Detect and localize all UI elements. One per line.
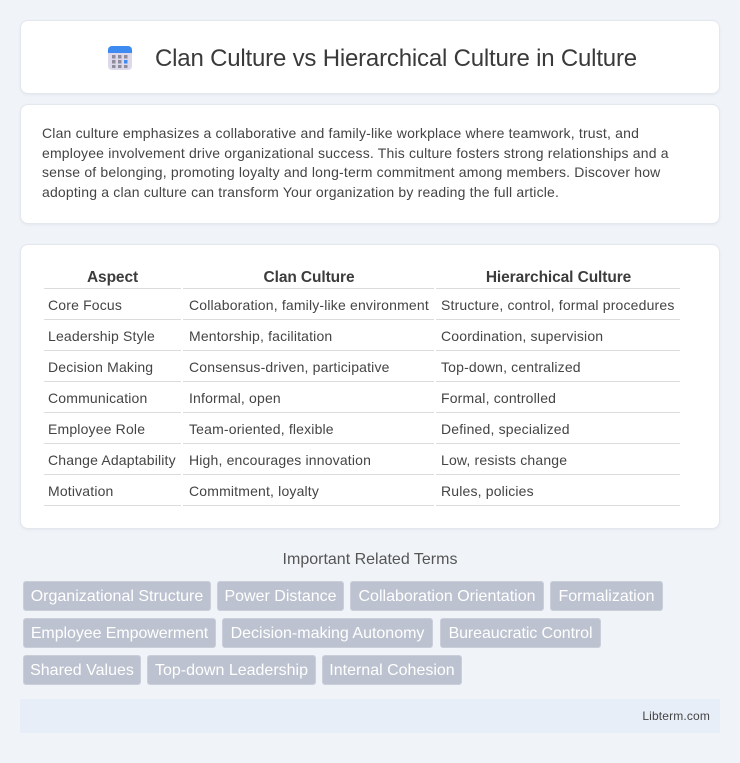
row: Decision Making: Top-down, centralized <box>441 359 581 375</box>
related terms tags: Employee Empowerment <box>31 625 208 642</box>
related terms tags: Formalization <box>558 588 655 605</box>
row: Decision Making: Consensus-driven, participative <box>189 359 390 375</box>
table header: Aspect <box>87 269 138 286</box>
row: Core Focus: Core Focus <box>48 297 122 313</box>
row: Core Focus: Collaboration, family-like environment <box>189 297 429 313</box>
related terms tags: Collaboration Orientation <box>358 588 536 605</box>
related terms tags: Bureaucratic Control <box>449 625 592 642</box>
intro paragraph: employee involvement drive organizational success. This culture fosters strong relationships and a <box>42 145 669 161</box>
icon: calendar <box>108 46 132 70</box>
row: Change Adaptability: High, encourages innovation <box>189 452 371 468</box>
intro paragraph <box>42 125 669 200</box>
row: Leadership Style: Mentorship, facilitation <box>189 328 332 344</box>
row: Communication <box>48 390 556 406</box>
row: Employee Role: Defined, specialized <box>441 421 570 437</box>
row: Communication: Informal, open <box>189 390 281 406</box>
row: Change Adaptability <box>48 452 567 468</box>
row: Employee Role <box>48 421 570 437</box>
row: Change Adaptability: Low, resists change <box>441 452 567 468</box>
row: Motivation: Rules, policies <box>441 483 534 499</box>
intro paragraph: Clan culture emphasizes a collaborative and family-like workplace where teamwork, trust, and <box>42 125 639 141</box>
row: Employee Role: Team-oriented, flexible <box>189 421 334 437</box>
row: Leadership Style: Coordination, supervision <box>441 328 603 344</box>
row: Leadership Style <box>48 328 603 344</box>
intro paragraph: adopting a clan culture can transform Your organization by reading the full article. <box>42 184 559 200</box>
related terms tags: Top-down Leadership <box>155 662 308 679</box>
header panel <box>20 20 720 94</box>
related terms tags: Organizational Structure <box>31 588 203 605</box>
row: Change Adaptability: Change Adaptability <box>48 452 176 468</box>
footer <box>20 699 720 733</box>
row: Communication: Communication <box>48 390 147 406</box>
related terms heading: Important Related Terms <box>283 551 457 568</box>
table header: Clan Culture <box>264 269 354 286</box>
row: Decision Making: Decision Making <box>48 359 153 375</box>
intro text panel <box>20 104 720 224</box>
row: Motivation: Commitment, loyalty <box>189 483 319 499</box>
related terms tags <box>23 581 663 685</box>
row: Decision Making <box>48 359 581 375</box>
row: Core Focus: Structure, control, formal procedures <box>441 297 674 313</box>
row: Motivation: Motivation <box>48 483 114 499</box>
row: Motivation <box>48 483 534 499</box>
title: Clan Culture vs Hierarchical Culture in Culture <box>155 45 637 72</box>
related terms tags: Shared Values <box>30 662 134 679</box>
comparison table panel <box>20 244 720 529</box>
row: Employee Role: Employee Role <box>48 421 145 437</box>
intro paragraph: sense of belonging, promoting loyalty and long-term commitment among members. Discover how <box>42 164 660 180</box>
row: Communication: Formal, controlled <box>441 390 556 406</box>
related terms tags: Power Distance <box>224 588 337 605</box>
row: Leadership Style: Leadership Style <box>48 328 155 344</box>
row: Core Focus <box>48 297 674 313</box>
related terms tags: Internal Cohesion <box>329 662 455 679</box>
related terms tags: Decision-making Autonomy <box>231 625 424 642</box>
table header <box>87 269 631 286</box>
table header: Hierarchical Culture <box>486 269 631 286</box>
footer credit: Libterm.com <box>642 709 710 723</box>
